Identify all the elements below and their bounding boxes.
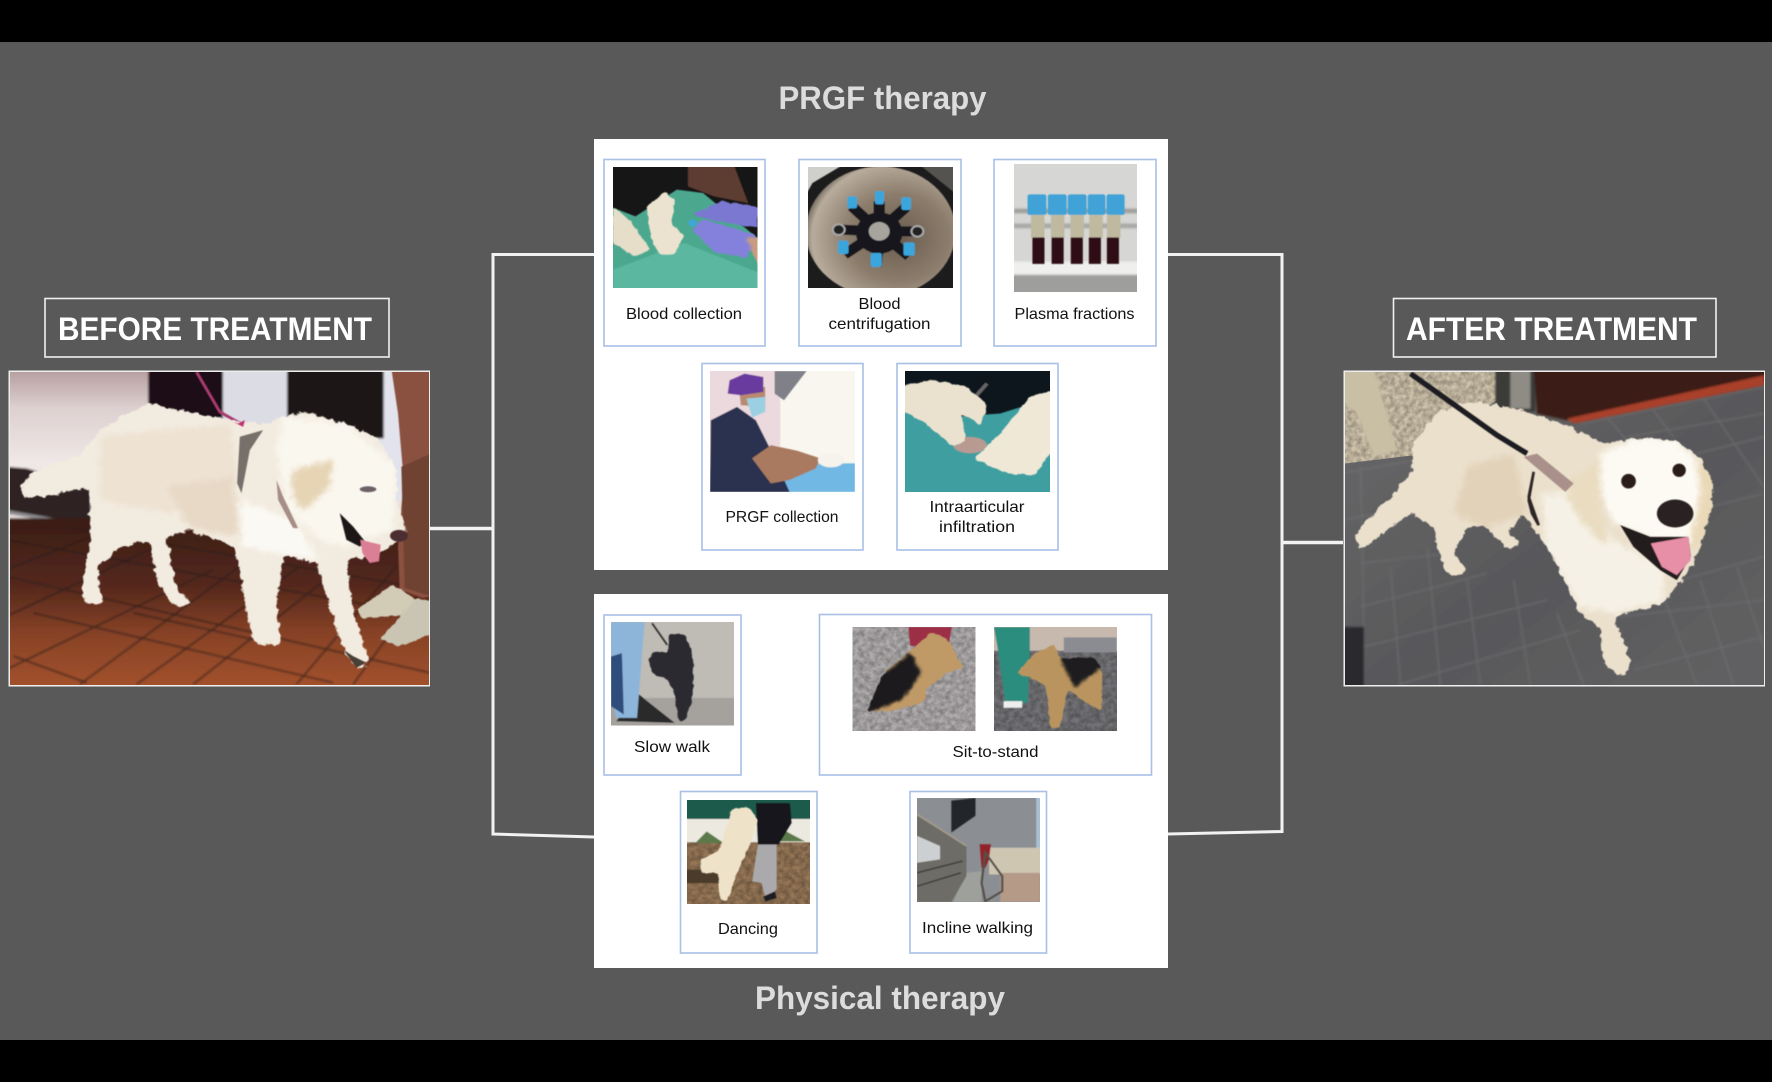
photo: intraarticular infiltration [905, 371, 1050, 492]
label: Blood [858, 296, 900, 313]
photo: dog standing [994, 627, 1117, 731]
card: Slow walk [604, 615, 741, 775]
dog body [1354, 400, 1713, 677]
label: Plasma fractions [1014, 306, 1134, 323]
label: Sit-to-stand [952, 744, 1038, 761]
label: PRGF collection [726, 509, 838, 526]
label box: after treatment [1394, 298, 1716, 357]
label: Blood collection [626, 306, 742, 323]
label box: before treatment [45, 298, 389, 357]
card: PRGF collection [702, 364, 863, 550]
label box: after treatment: AFTER TREATMENT [1406, 311, 1697, 347]
photo: dog before treatment [7, 369, 433, 688]
card: Blood centrifugation [799, 160, 961, 346]
card: Intraarticular infiltration [897, 364, 1058, 550]
connector: left bracket [493, 254, 594, 837]
photo: slow walk [611, 622, 734, 726]
label: centrifugation [828, 316, 930, 333]
card: Plasma fractions [994, 160, 1156, 346]
card: Incline walking [910, 792, 1046, 953]
photo: dancing [687, 800, 810, 904]
label: Dancing [718, 921, 778, 938]
heading: PRGF therapy: PRGF therapy [778, 80, 987, 116]
label: Intraarticular [930, 499, 1025, 516]
label box: before treatment: BEFORE TREATMENT [58, 311, 372, 347]
connector: right bracket to after photo [1282, 541, 1343, 544]
photo: plasma tubes [1014, 164, 1137, 292]
label: Slow walk [634, 739, 711, 756]
connector: right bracket [1168, 254, 1282, 834]
photo: blood collection [613, 167, 758, 288]
heading: Physical therapy: Physical therapy [755, 980, 1005, 1016]
bottom black bar [0, 1040, 1772, 1082]
top black bar [0, 0, 1772, 42]
panel: Physical therapy [594, 594, 1168, 968]
dog body [20, 404, 408, 668]
photo: dog sitting [852, 627, 976, 731]
photo: dog after treatment [1341, 369, 1770, 688]
card: Sit-to-stand [820, 614, 1152, 775]
label: Incline walking [922, 920, 1033, 937]
panel: PRGF therapy [594, 139, 1168, 570]
photo: centrifuge [808, 167, 953, 288]
connector: before photo to left bracket [430, 527, 493, 530]
photo: PRGF collection [710, 371, 855, 492]
card: Blood collection [604, 160, 765, 346]
photo: incline walking [917, 798, 1040, 902]
card: Dancing [680, 792, 817, 953]
label: infiltration [939, 519, 1015, 536]
